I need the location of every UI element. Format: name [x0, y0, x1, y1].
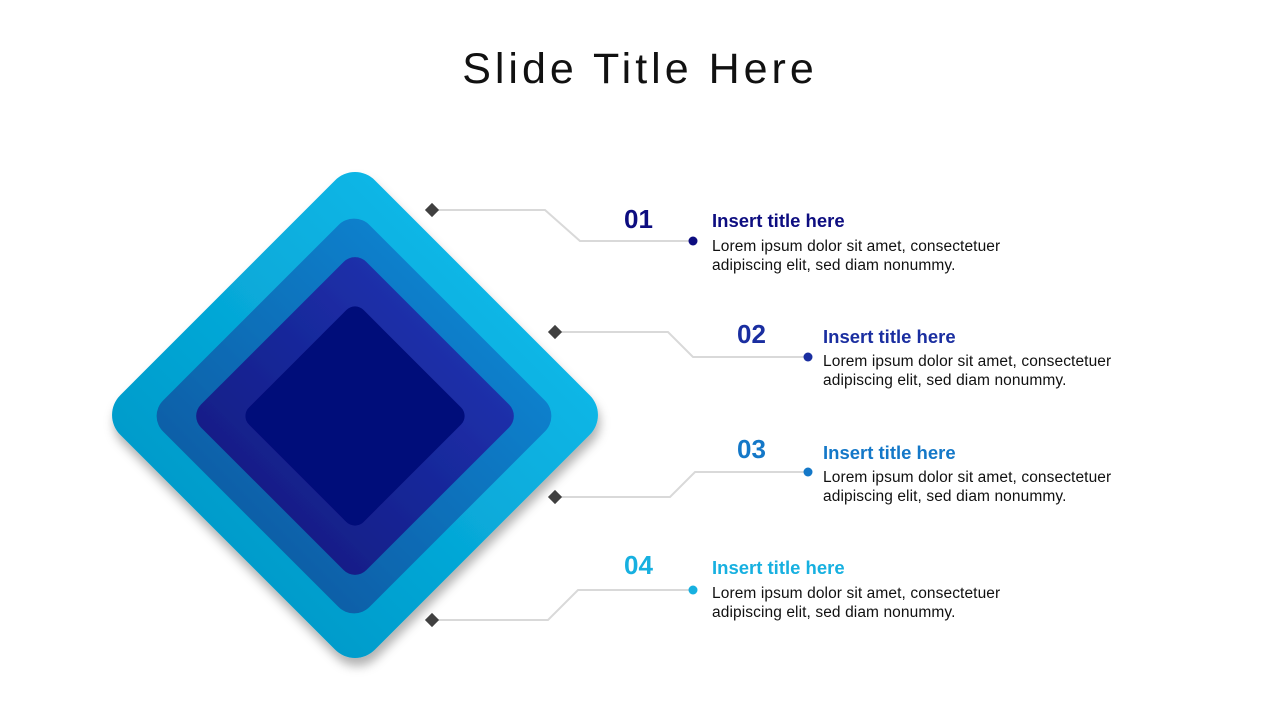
item 04: Insert title here: [712, 557, 845, 578]
item 04: adipiscing elit, sed diam nonummy.: [712, 604, 955, 621]
item 02: Insert title here: [823, 326, 956, 347]
title: Slide Title Here: [462, 45, 818, 93]
item 01: Insert title here: [712, 210, 845, 231]
item 02: adipiscing elit, sed diam nonummy.: [823, 372, 1066, 389]
item 04: 04: [624, 550, 653, 580]
item 02: 02: [737, 319, 766, 349]
item 03: Insert title here: [823, 442, 956, 463]
item 03: 03: [737, 434, 766, 464]
item 01: Lorem ipsum dolor sit amet, consectetuer: [712, 238, 1000, 255]
item 03: Lorem ipsum dolor sit amet, consectetuer: [823, 469, 1111, 486]
connectors: [432, 210, 808, 620]
item 01: adipiscing elit, sed diam nonummy.: [712, 257, 955, 274]
item 03: adipiscing elit, sed diam nonummy.: [823, 488, 1066, 505]
item 01: 01: [624, 204, 653, 234]
item 02: Lorem ipsum dolor sit amet, consectetuer: [823, 353, 1111, 370]
item 04: Lorem ipsum dolor sit amet, consectetuer: [712, 585, 1000, 602]
